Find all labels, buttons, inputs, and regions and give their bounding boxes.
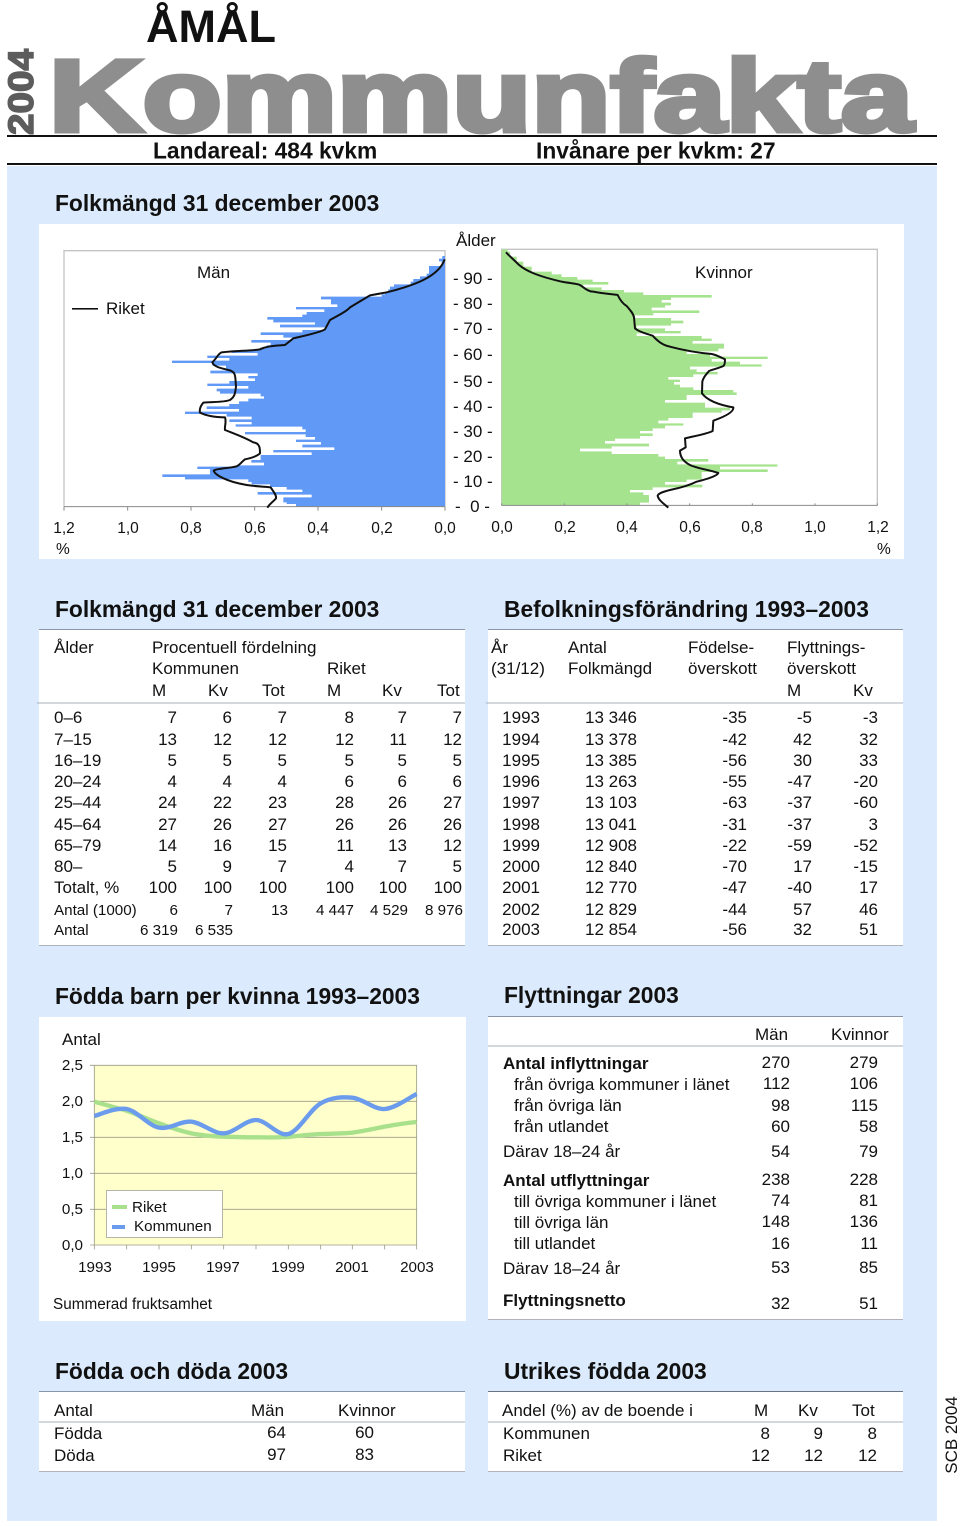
table values: 12 829 [585, 900, 637, 919]
table text [54, 1401, 396, 1465]
table values: 1997 [502, 793, 540, 812]
table values [140, 708, 463, 939]
table values: 22 [213, 793, 232, 812]
table values: 4 [278, 772, 287, 791]
table values: 8 976 [425, 902, 463, 919]
table header: överskott [787, 659, 856, 678]
row labels: 7–15 [54, 730, 92, 749]
table values: 5 [168, 751, 177, 770]
table values: 228 [850, 1170, 878, 1189]
table header: M [327, 681, 341, 700]
table values: -52 [853, 836, 878, 855]
table values: 12 [268, 730, 287, 749]
women x axis labels: 1,2 [867, 519, 889, 536]
table text [502, 1401, 877, 1465]
table values: -70 [722, 857, 747, 876]
table values: 28 [335, 793, 354, 812]
table values: 81 [859, 1191, 878, 1210]
table values: 58 [859, 1117, 878, 1136]
table header: (31/12) [491, 659, 545, 678]
heading: Födda barn per kvinna: Födda barn per kvinna 1993–2003 [55, 983, 420, 1009]
row labels: från övriga kommuner i länet [514, 1075, 730, 1094]
legend: Riket: Riket [106, 299, 145, 318]
table values: 5 [168, 857, 177, 876]
men x axis labels: 0,4 [307, 520, 329, 537]
row labels: Antal (1000) [54, 902, 137, 919]
table values: 79 [859, 1142, 878, 1161]
table text: Riket [503, 1446, 542, 1465]
table values: -47 [722, 878, 747, 897]
table values: 12 770 [585, 878, 637, 897]
table values: 5 [278, 751, 287, 770]
table values: 7 [225, 902, 233, 919]
row labels: 25–44 [54, 793, 101, 812]
row labels: till utlandet [514, 1234, 596, 1253]
x axis labels: 1995 [142, 1259, 176, 1276]
panel: migration table [488, 1016, 903, 1320]
row labels: 0–6 [54, 708, 82, 727]
table values: 27 [443, 793, 462, 812]
row labels: Totalt, % [54, 878, 119, 897]
x axis labels: 1993 [78, 1259, 112, 1276]
table text: 12 [804, 1446, 823, 1465]
age labels: - 20 - [453, 447, 493, 466]
header rules [7, 135, 937, 165]
table values: 1994 [502, 730, 540, 749]
table text: 9 [814, 1424, 823, 1443]
table values: 24 [158, 793, 177, 812]
table values: 100 [204, 878, 232, 897]
line: Kommunen [94, 1094, 417, 1134]
men x axis labels: 1,0 [117, 520, 139, 537]
men x axis labels: 0,2 [371, 520, 393, 537]
table values: 17 [793, 857, 812, 876]
panel: population pyramid [39, 224, 904, 559]
table header: Födelse- [688, 638, 754, 657]
row labels: Därav 18–24 år [503, 1259, 621, 1278]
table values: 12 [213, 730, 232, 749]
table values: 2001 [502, 878, 540, 897]
heading: Folkmängd pyramid: Folkmängd 31 december 2003 [55, 190, 379, 216]
men x axis labels: % [56, 541, 70, 558]
table text: 97 [267, 1445, 286, 1464]
row labels: Därav 18–24 år [503, 1142, 621, 1161]
table values [762, 1053, 878, 1313]
table values: 100 [379, 878, 407, 897]
note: Summerad fruktsamhet [53, 1296, 213, 1313]
table values: 5 [398, 751, 407, 770]
table values: 13 [388, 836, 407, 855]
table values: 5 [453, 857, 462, 876]
table values: 11 [336, 836, 354, 855]
table values: 32 [859, 730, 878, 749]
y axis labels: 1,0 [62, 1165, 83, 1182]
table header: Antal [568, 638, 607, 657]
table text: 60 [355, 1423, 374, 1442]
year 2004: 2004 [2, 48, 41, 135]
row labels: från utlandet [514, 1117, 609, 1136]
y axis labels: 1,5 [62, 1129, 83, 1146]
table values: -47 [787, 772, 812, 791]
table values: 112 [763, 1074, 790, 1093]
title: ÅMÅL [146, 1, 276, 52]
table values: 6 319 [140, 922, 178, 939]
table values: 51 [859, 1294, 878, 1313]
age labels: - 10 - [453, 472, 493, 491]
table values: 32 [771, 1294, 790, 1313]
table values: 42 [793, 730, 812, 749]
table values: -35 [722, 708, 747, 727]
y axis labels [62, 1057, 83, 1254]
table values: -20 [853, 772, 878, 791]
table values: 98 [771, 1096, 790, 1115]
table values: 2000 [502, 857, 540, 876]
table values: 6 535 [195, 922, 233, 939]
y axis labels: 2,0 [62, 1093, 83, 1110]
table values: 26 [388, 815, 407, 834]
table values: 46 [859, 900, 878, 919]
table values: 53 [771, 1258, 790, 1277]
table values: 13 263 [585, 772, 637, 791]
table values: 7 [278, 857, 287, 876]
table values: 1996 [502, 772, 540, 791]
table values [502, 708, 878, 939]
men x axis labels: 1,2 [53, 520, 75, 537]
men Riket line [200, 259, 445, 508]
table values: 4 [168, 772, 177, 791]
row labels: 16–19 [54, 751, 101, 770]
row labels: Antal [54, 922, 89, 939]
panel: births and deaths table [39, 1391, 465, 1472]
legend: Riket [72, 299, 145, 318]
table header [54, 638, 460, 700]
land area: Landareal: 484 kvkm [153, 138, 377, 164]
table text: 8 [868, 1424, 877, 1443]
table values: -37 [787, 793, 812, 812]
table values: -60 [853, 793, 878, 812]
table header: Kv [208, 681, 228, 700]
table values: 13 346 [585, 708, 637, 727]
table values: -15 [853, 857, 878, 876]
heading: Utrikes födda: Utrikes födda 2003 [504, 1358, 707, 1384]
table values: 8 [345, 708, 354, 727]
table values: 30 [793, 751, 812, 770]
x axis labels: 2001 [335, 1259, 369, 1276]
table values: 33 [859, 751, 878, 770]
table values: 13 385 [585, 751, 637, 770]
table values: 1995 [502, 751, 540, 770]
table values: 11 [860, 1234, 878, 1253]
age labels: - 80 - [453, 294, 493, 313]
table values: 100 [326, 878, 354, 897]
label: Ålder: Ålder [456, 231, 496, 250]
table values: 6 [398, 772, 407, 791]
table values: 26 [213, 815, 232, 834]
table values: 12 [443, 836, 462, 855]
table values: 7 [453, 708, 462, 727]
table values: 1993 [502, 708, 540, 727]
row labels: från övriga län [514, 1096, 622, 1115]
label: Män: Män [197, 263, 230, 282]
table header: överskott [688, 659, 757, 678]
row labels [54, 708, 137, 939]
table values: 54 [771, 1142, 790, 1161]
table values: 23 [268, 793, 287, 812]
table text: 12 [858, 1446, 877, 1465]
table values: 1998 [502, 815, 540, 834]
table values: 15 [268, 836, 287, 855]
table text: Födda [54, 1424, 103, 1443]
row labels: 45–64 [54, 815, 101, 834]
heading: Folkmängd table: Folkmängd 31 december 2003 [55, 596, 379, 622]
women x axis labels: 0,8 [741, 519, 763, 536]
women x axis labels: 0,6 [679, 519, 701, 536]
men x axis labels: 0,8 [180, 520, 202, 537]
table values: 115 [851, 1096, 878, 1115]
women Riket line [506, 252, 733, 508]
age labels: - 90 - [453, 269, 493, 288]
age labels: - 40 - [453, 397, 493, 416]
table header: M [787, 681, 801, 700]
table values: 12 840 [585, 857, 637, 876]
label: Antal: Antal [62, 1030, 101, 1049]
heading: Befolkningsförändring: Befolkningsförändring 1993–2003 [504, 596, 869, 622]
age labels: - 50 - [453, 372, 493, 391]
table header: Folkmängd [568, 659, 652, 678]
label: Kvinnor: Kvinnor [695, 263, 753, 282]
table values: 27 [268, 815, 287, 834]
table values: -59 [787, 836, 812, 855]
legend: Kommunen [134, 1218, 212, 1235]
men x axis labels [53, 520, 456, 558]
table values: 57 [793, 900, 812, 919]
panel: fertility line chart [39, 1017, 466, 1321]
table values: 238 [762, 1170, 790, 1189]
table values: 13 041 [585, 815, 637, 834]
table text: Antal [54, 1401, 93, 1420]
table values: -42 [722, 730, 747, 749]
women x axis labels: 1,0 [804, 519, 826, 536]
table values: 12 908 [585, 836, 637, 855]
table text: Kvinnor [338, 1401, 396, 1420]
table values: -55 [722, 772, 747, 791]
heading: Födda och döda: Födda och döda 2003 [55, 1358, 288, 1384]
table values: 26 [443, 815, 462, 834]
table values: 9 [223, 857, 232, 876]
table values: 12 854 [585, 920, 637, 939]
table values: 12 [335, 730, 354, 749]
y axis labels: 2,5 [62, 1057, 83, 1074]
table values: 136 [850, 1212, 878, 1231]
age labels: - 70 - [453, 319, 493, 338]
table values: 2003 [502, 920, 540, 939]
row labels: Antal inflyttningar [503, 1054, 649, 1073]
table values: 6 [345, 772, 354, 791]
table header: Kommunen [152, 659, 239, 678]
y axis labels: 0,5 [62, 1201, 83, 1218]
table header [755, 1025, 889, 1044]
legend: Riket [132, 1199, 167, 1216]
table values: 13 378 [585, 730, 637, 749]
x axis labels: 1997 [206, 1259, 240, 1276]
table values: -44 [722, 900, 747, 919]
panel: age distribution table [37, 629, 465, 946]
table values: 4 447 [316, 902, 354, 919]
x axis labels [78, 1259, 434, 1276]
panel: population change table [486, 629, 903, 946]
men bars and frame [64, 251, 445, 511]
table values: 6 [170, 902, 178, 919]
men x axis labels: 0,0 [434, 520, 456, 537]
table values: 3 [869, 815, 878, 834]
table values: 7 [168, 708, 177, 727]
table values: -5 [797, 708, 812, 727]
table values: 85 [859, 1258, 878, 1277]
table values: 279 [850, 1053, 878, 1072]
table header: M [152, 681, 166, 700]
table values: 5 [345, 751, 354, 770]
x axis labels: 1999 [271, 1259, 305, 1276]
table header: Kv [853, 681, 873, 700]
table header: Ålder [54, 638, 94, 657]
table values: 13 [158, 730, 177, 749]
women x axis labels [491, 519, 891, 558]
row labels: 65–79 [54, 836, 101, 855]
table values: 14 [158, 836, 177, 855]
table values: -31 [722, 815, 747, 834]
women x axis labels: 0,4 [616, 519, 638, 536]
table values: 4 529 [370, 902, 408, 919]
age labels: - 0 - [455, 497, 490, 516]
table header: Flyttnings- [787, 638, 865, 657]
row labels: till övriga län [514, 1213, 608, 1232]
legend [106, 1190, 222, 1238]
table values: -63 [722, 793, 747, 812]
table values: 106 [850, 1074, 878, 1093]
table values: -56 [722, 751, 747, 770]
table header: Män [755, 1025, 788, 1044]
table header: Tot [437, 681, 460, 700]
table text: 83 [355, 1445, 374, 1464]
women x axis labels: 0,0 [491, 519, 513, 536]
table values: 51 [859, 920, 878, 939]
y axis labels: 0,0 [62, 1237, 83, 1254]
table header: Riket [327, 659, 366, 678]
table text: Döda [54, 1446, 95, 1465]
table values: -22 [722, 836, 747, 855]
men x axis labels: 0,6 [244, 520, 266, 537]
table values: 17 [859, 878, 878, 897]
chart plot [90, 1065, 417, 1249]
table header: Kvinnor [831, 1025, 889, 1044]
table values: -3 [863, 708, 878, 727]
table values: 7 [398, 857, 407, 876]
table values: 270 [762, 1053, 790, 1072]
row labels: 80– [54, 857, 83, 876]
table values: 7 [278, 708, 287, 727]
table text: 12 [751, 1446, 770, 1465]
table values: 11 [389, 730, 407, 749]
table values: 74 [771, 1191, 790, 1210]
row labels [503, 1054, 730, 1310]
table values: 5 [223, 751, 232, 770]
table values: 100 [149, 878, 177, 897]
x axis labels: 2003 [400, 1259, 434, 1276]
table text: 8 [761, 1424, 770, 1443]
row labels: 20–24 [54, 772, 101, 791]
table values: 6 [223, 708, 232, 727]
women x axis labels: % [877, 541, 891, 558]
table text: 64 [267, 1423, 286, 1442]
table text: Tot [852, 1401, 875, 1420]
table header: Procentuell fördelning [152, 638, 316, 657]
table values: 27 [158, 815, 177, 834]
table values: 148 [762, 1212, 790, 1231]
table values: 13 [271, 902, 288, 919]
table values: 12 [443, 730, 462, 749]
age labels: - 60 - [453, 345, 493, 364]
table values: 26 [335, 815, 354, 834]
table text: Män [251, 1401, 284, 1420]
table values: 16 [213, 836, 232, 855]
population density: Invånare per kvkm: 27 [536, 138, 776, 164]
table header: Tot [262, 681, 285, 700]
table values: 1999 [502, 836, 540, 855]
logo: Kommunfakta: Kommunfakta [49, 39, 915, 153]
table values: 2002 [502, 900, 540, 919]
row labels: Flyttningsnetto [503, 1291, 626, 1310]
table text: Andel (%) av de boende i [502, 1401, 693, 1420]
table values: 4 [223, 772, 232, 791]
table values: 60 [771, 1117, 790, 1136]
table header: År [491, 638, 508, 657]
table values: -40 [787, 878, 812, 897]
women bars and frame [502, 249, 877, 508]
table values: 26 [388, 793, 407, 812]
table values: 100 [434, 878, 462, 897]
table values: 16 [771, 1234, 790, 1253]
table values: 7 [398, 708, 407, 727]
table values: 6 [453, 772, 462, 791]
table values: 4 [345, 857, 354, 876]
age labels [453, 269, 493, 516]
line: Riket [94, 1102, 417, 1137]
table values: 100 [259, 878, 287, 897]
table text: Kommunen [503, 1424, 590, 1443]
table text: M [754, 1401, 768, 1420]
women x axis labels: 0,2 [554, 519, 576, 536]
table header: Kv [382, 681, 402, 700]
age labels: - 30 - [453, 422, 493, 441]
table values: -56 [722, 920, 747, 939]
table values: 5 [453, 751, 462, 770]
table values: 13 103 [585, 793, 637, 812]
table values: 32 [793, 920, 812, 939]
table header [491, 638, 873, 700]
row labels: Antal utflyttningar [503, 1171, 650, 1190]
table values: -37 [787, 815, 812, 834]
panel: foreign-born table [488, 1391, 903, 1472]
table text: Kv [798, 1401, 818, 1420]
row labels: till övriga kommuner i länet [514, 1192, 716, 1211]
heading: Flyttningar: Flyttningar 2003 [504, 982, 679, 1008]
